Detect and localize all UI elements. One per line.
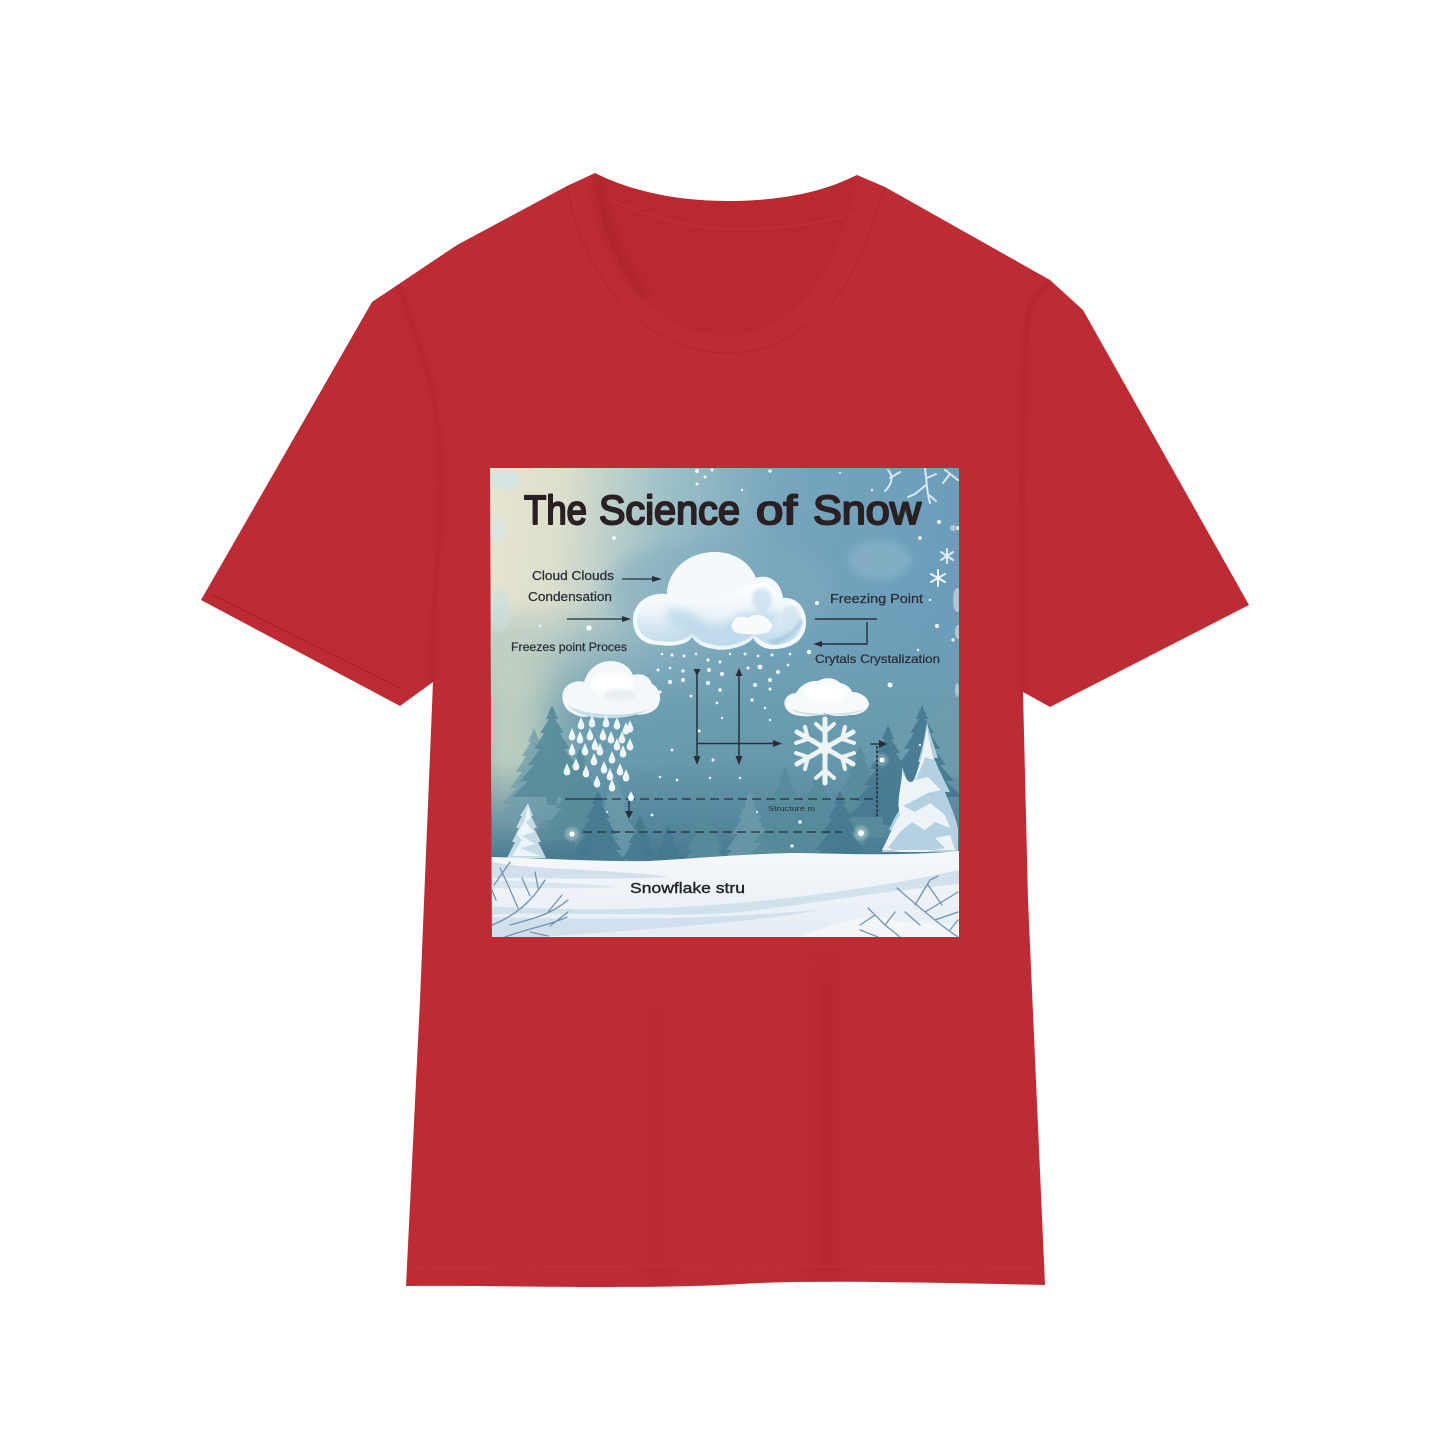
right edge frost splashes [950,525,959,697]
product mockup: red t-shirt with printed infographic [201,173,1249,1287]
small down arrow with drop [625,791,634,819]
label: cloud clouds: Cloud Clouds [532,569,614,583]
panel: printed infographic [470,466,985,940]
arrow: freezing point bracket [813,619,877,647]
title: Snow [813,487,921,533]
glowing light orbs [565,754,888,841]
arrows: central process diagram [694,668,782,765]
t-shirt [201,173,1249,1287]
icon: small snowflake right upper [941,549,953,563]
label: structure: Structure m [768,804,815,813]
arrow: condensation [567,616,631,622]
icon: large snowy fir tree [882,722,958,852]
icon: main cloud [633,552,806,650]
icon: frost branches bottom right [860,876,958,937]
label: crystals crystalization: Crytals Crystalization [815,652,940,666]
title: The [524,487,587,533]
icon: right cloud [784,678,869,716]
icon: small snowy fir tree [507,803,546,858]
icon: snowflake [796,719,854,783]
label: condensation: Condensation [528,590,612,604]
background forest [488,685,985,925]
far tree layer [500,728,959,861]
arrow: cloud clouds [622,576,662,582]
snow drift shadows [492,862,670,879]
title: Science [599,487,740,533]
icon: frost branches top right [885,469,958,503]
icon: small snowflake right lower [931,570,945,586]
shirt body silhouette [201,173,1249,1287]
near tree layer [575,705,959,862]
shirt shading and seams [213,173,1050,1285]
label: snowflake structure: Snowflake stru [630,880,745,897]
title [524,494,922,526]
snow ground [488,851,960,940]
title: of [756,487,798,533]
icon: left rain cloud [562,661,660,718]
panel background sky [470,466,962,940]
mid tree layer [512,705,888,858]
snow dots [539,468,960,848]
forest haze [488,760,962,860]
label: freezing point: Freezing Point [830,592,924,606]
dashed guide lines and right elbow arrow [565,740,887,832]
label: freezes point process: Freezes point Proces [511,640,627,654]
icon: falling rain drops [564,715,633,792]
icon: frost branches bottom left [492,862,568,937]
